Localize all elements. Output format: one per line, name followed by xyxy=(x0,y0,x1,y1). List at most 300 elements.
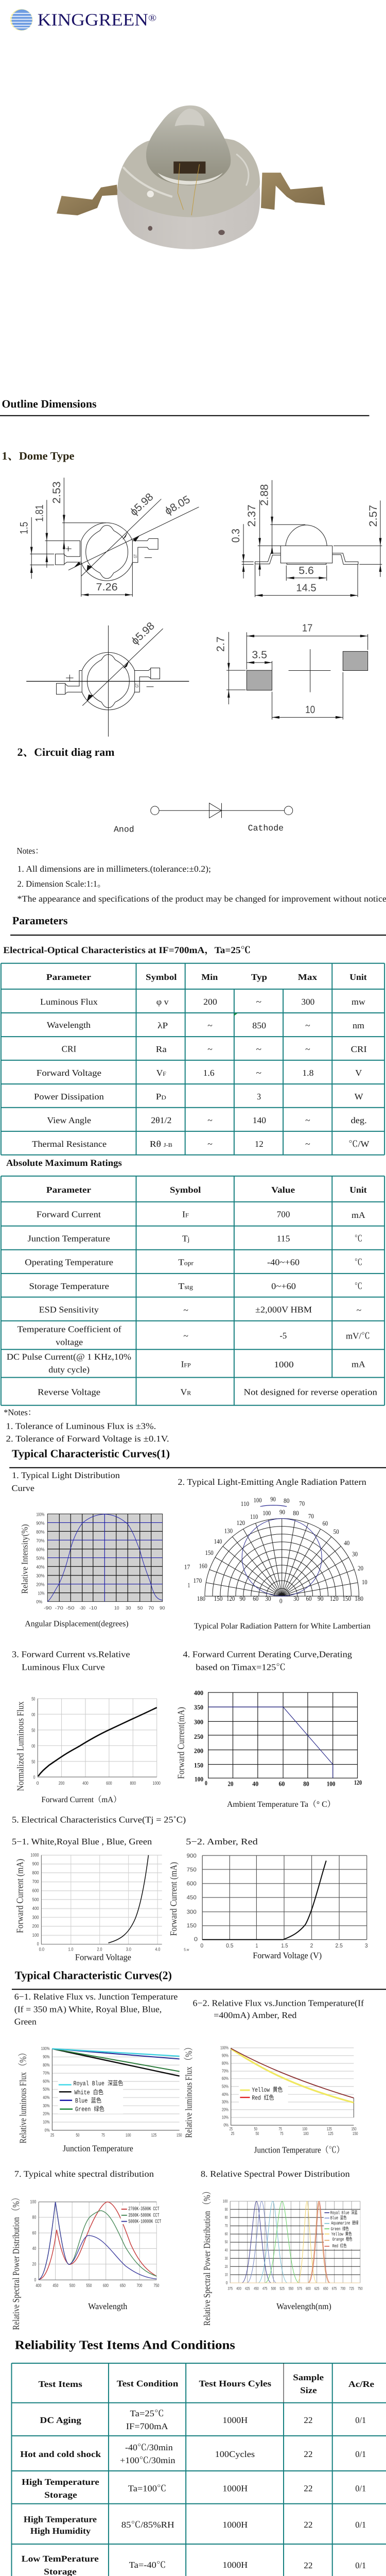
chart 7: white spectral distribution: 100 xyxy=(30,2199,36,2205)
chart 5-1: forward current vs voltage: 300 xyxy=(32,1914,39,1920)
table: electrical-optical characteristics: VF xyxy=(156,1068,166,1078)
chart 6-1: relative flux vs junction temperature: 90% xyxy=(43,2054,50,2059)
chart 5-2: forward current vs voltage: 750 xyxy=(187,1866,197,1873)
table: reliability tests: Storage xyxy=(44,2490,77,2500)
chart 5-1: forward current vs voltage xyxy=(15,1852,162,1962)
chart 8: relative spectral power distribution: 625 xyxy=(314,2286,319,2291)
table: electrical-optical characteristics xyxy=(1,963,384,1155)
chart 7: white spectral distribution: 400 xyxy=(36,2283,41,2288)
chart 1: light distribution curve: -30 xyxy=(79,1605,85,1611)
chart 2: polar radiation pattern: 40 xyxy=(344,1539,349,1547)
chart 2: polar radiation pattern: 60 xyxy=(323,1520,328,1527)
chart 6-1: relative flux vs junction temperature: 70% xyxy=(43,2071,50,2076)
chart 1: light distribution curve: 10% xyxy=(38,1591,45,1596)
chart 3: normalized luminous flux vs forward current: 600 xyxy=(106,1781,112,1786)
table: absolute maximum ratings: -5 xyxy=(279,1331,287,1341)
chart 2: polar radiation pattern: 60 xyxy=(306,1595,312,1602)
chart 5-2: forward current vs voltage: 2 xyxy=(310,1942,313,1948)
table: electrical-optical characteristics: 140 xyxy=(253,1115,266,1125)
chart 5-1: forward current vs voltage: 4.0 xyxy=(155,1946,160,1952)
chart 5-2: forward current vs voltage: 600 xyxy=(187,1880,197,1887)
table: electrical-optical characteristics: PD xyxy=(156,1092,166,1101)
drawing: top view with dimensions: 2.53 xyxy=(51,481,63,504)
circuit diagram: diode symbol: Cathode xyxy=(248,823,284,833)
chart 6-1: relative flux vs junction temperature: 125 xyxy=(151,2132,156,2138)
chart 1: light distribution curve: 30 xyxy=(126,1605,131,1611)
drawing: side view with dimensions: 2.88 xyxy=(258,484,270,506)
chart 7: white spectral distribution: 20 xyxy=(32,2262,36,2267)
chart 5-1: forward current vs voltage: 800 xyxy=(32,1870,39,1875)
table: reliability tests: Ta=-40℃ xyxy=(129,2560,166,2570)
table: reliability tests: Hot and cold shock xyxy=(20,2449,101,2459)
drawing: top view with dimensions xyxy=(18,478,199,597)
chart 6-2: relative flux vs junction temperature: 50 xyxy=(255,2131,259,2136)
chart 8 title: 8. Relative Spectral Power Distribution xyxy=(201,2169,350,2179)
chart 5-2: forward current vs voltage: 900 xyxy=(187,1852,197,1859)
drawing: lower-left top view xyxy=(26,620,189,737)
chart 1: light distribution curve xyxy=(20,1512,165,1628)
table: absolute maximum ratings: Storage Temperature xyxy=(29,1281,109,1291)
table: reliability tests: 0/1 xyxy=(355,2561,366,2570)
chart 7: white spectral distribution: 0 xyxy=(34,2277,36,2282)
chart 2: polar radiation pattern: 120 xyxy=(237,1519,245,1527)
table: electrical-optical characteristics: Luminous Flux xyxy=(40,997,98,1007)
heading: 2 Circuit diagram: 2、Circuit diag ram xyxy=(17,746,114,758)
table: absolute maximum ratings: IF xyxy=(182,1210,189,1219)
table: absolute maximum ratings: 700 xyxy=(277,1210,290,1219)
chart 1: light distribution curve: 30% xyxy=(36,1573,45,1579)
chart 5-2: forward current vs voltage: 1 xyxy=(255,1942,258,1948)
table: absolute maximum ratings: Temperature Coefficient of xyxy=(17,1325,121,1334)
chart 2: polar radiation pattern: 160 xyxy=(199,1562,207,1569)
heading: Outline Dimensions: Outline Dimensions xyxy=(2,398,97,410)
notes text: Notes： xyxy=(17,846,43,856)
chart 1: light distribution curve: 90 xyxy=(160,1605,165,1611)
chart 2: polar radiation pattern: 120 xyxy=(330,1595,339,1602)
chart 6-2: relative flux vs junction temperature: 100 xyxy=(303,2131,309,2136)
chart 4 title: 4. Forward Current Derating Curve,Derating xyxy=(183,1650,352,1659)
table: absolute maximum ratings: mV/℃ xyxy=(346,1331,370,1341)
chart 5-1: forward current vs voltage: Forward Voltage xyxy=(75,1953,131,1962)
logo mark xyxy=(10,9,33,30)
chart 5-1: forward current vs voltage: 1.0 xyxy=(68,1946,74,1952)
chart 6-2: relative flux vs junction temperature: Yellow 黄色 xyxy=(252,2086,283,2094)
chart 8: relative spectral power distribution: 70 xyxy=(225,2223,227,2228)
table: absolute maximum ratings: voltage xyxy=(56,1337,83,1347)
chart 3 title: Luminous Flux Curve xyxy=(22,1663,105,1672)
chart 3: normalized luminous flux vs forward current: 1000 xyxy=(153,1781,161,1786)
chart 8: relative spectral power distribution: Green 绿色 xyxy=(331,2226,349,2232)
chart 6-2: relative flux vs junction temperature xyxy=(184,2043,358,2155)
table: reliability tests: High Temperature xyxy=(24,2515,97,2524)
section: absolute maximum ratings table and notes xyxy=(1,1176,384,1460)
chart 2: polar radiation pattern: 50 xyxy=(334,1528,339,1535)
chart 8: relative spectral power distribution: 525 xyxy=(279,2286,285,2291)
LED product photo xyxy=(57,106,325,249)
table: reliability tests: 1000H xyxy=(222,2560,248,2570)
chart 8: relative spectral power distribution: Relative Spectral Power Distribution （%） xyxy=(202,2187,212,2326)
chart 6-2: relative flux vs junction temperature: 10% xyxy=(222,2115,229,2120)
header: logo and LED photo xyxy=(10,9,325,249)
notes text: 2. Dimension Scale:1:1。 xyxy=(17,879,106,889)
table: reliability tests: 22 xyxy=(304,2449,312,2459)
chart 4: forward current derating curve: 100 xyxy=(195,1776,203,1783)
table: absolute maximum ratings: Forward Current xyxy=(37,1210,101,1219)
table: absolute maximum ratings: Tstg xyxy=(178,1281,193,1291)
chart 5-1: forward current vs voltage: 200 xyxy=(32,1924,39,1929)
chart 1: light distribution curve: 50 xyxy=(137,1605,143,1611)
chart 1: light distribution curve: -90 xyxy=(44,1605,51,1611)
chart 4: forward current derating curve: Forward Current(mA) xyxy=(176,1707,186,1779)
chart 3: normalized luminous flux vs forward current xyxy=(15,1697,161,1804)
chart 6-1: relative flux vs junction temperature: 50% xyxy=(43,2087,50,2092)
table: reliability tests: Test Items xyxy=(39,2379,82,2389)
chart 6-1: relative flux vs junction temperature: 60% xyxy=(43,2079,50,2084)
chart 2: polar radiation pattern: 70 xyxy=(299,1500,305,1507)
chart 2: polar radiation pattern xyxy=(184,1496,371,1630)
chart 2: polar radiation pattern: 150 xyxy=(205,1549,214,1556)
chart 7: white spectral distribution: 650 xyxy=(120,2283,126,2288)
chart 6-2: relative flux vs junction temperature: 25 xyxy=(231,2131,234,2136)
table: absolute maximum ratings: IFP xyxy=(181,1360,191,1369)
table title: absolute maximum ratings: Absolute Maximum Ratings xyxy=(6,1158,122,1168)
chart 6-2: relative flux vs junction temperature: 60% xyxy=(222,2076,229,2081)
table: absolute maximum ratings: ℃ xyxy=(355,1258,362,1267)
chart 8: relative spectral power distribution: Orange 橙色 xyxy=(332,2236,352,2242)
chart 3: normalized luminous flux vs forward current: 50 xyxy=(31,1759,35,1765)
chart 4: forward current derating curve: Ambient Temperature Ta（° C） xyxy=(227,1800,335,1809)
chart 1 title: 1. Typical Light Distribution xyxy=(12,1470,120,1480)
chart 4: forward current derating curve: 40 xyxy=(252,1780,258,1787)
chart 8: relative spectral power distribution: 60 xyxy=(225,2231,227,2236)
chart 5-1 title: 5−1. White,Royal Blue , Blue, Green xyxy=(12,1837,152,1846)
chart 3: normalized luminous flux vs forward current: 00 xyxy=(31,1743,35,1749)
table: reliability tests: 1000H xyxy=(222,2520,248,2530)
chart 1: light distribution curve: -50 xyxy=(66,1605,74,1611)
chart 6-2: relative flux vs junction temperature: 150 xyxy=(353,2131,358,2136)
chart 8: relative spectral power distribution: 20 xyxy=(225,2264,227,2269)
chart 7: white spectral distribution xyxy=(11,2194,161,2330)
chart 8: relative spectral power distribution: 40 xyxy=(225,2248,227,2252)
table: electrical-optical characteristics: 12 xyxy=(255,1139,264,1149)
chart 4: forward current derating curve: 300 xyxy=(194,1718,203,1725)
section: reliability test items xyxy=(11,2338,386,2576)
chart 6-2: relative flux vs junction temperature: Relative luminous Flux （%） xyxy=(184,2043,194,2138)
table: electrical-optical characteristics: CRI xyxy=(351,1044,367,1054)
chart 2: polar radiation pattern: 17 xyxy=(184,1563,190,1570)
chart 6-1 title: (If = 350 mA) White, Royal Blue, Blue, xyxy=(14,2004,162,2014)
circuit diagram: diode symbol: Anod xyxy=(114,825,134,835)
chart 5-2: forward current vs voltage: 3 xyxy=(365,1942,368,1948)
chart 4: forward current derating curve: 100 xyxy=(327,1780,335,1787)
table: reliability tests: 85℃/85%RH xyxy=(121,2520,174,2530)
table: absolute maximum ratings: ℃ xyxy=(355,1281,362,1291)
chart 3: normalized luminous flux vs forward current: 0 xyxy=(37,1781,39,1786)
chart 6-1: relative flux vs junction temperature: 20% xyxy=(43,2111,50,2116)
chart 4: forward current derating curve: 0 xyxy=(205,1780,207,1787)
chart 2: polar radiation pattern: 110 xyxy=(250,1513,258,1520)
chart 7: white spectral distribution: 600 xyxy=(103,2283,109,2288)
table: electrical-optical characteristics: View Angle xyxy=(47,1115,91,1125)
table: reliability tests: 0/1 xyxy=(355,2484,366,2493)
chart 6-2 title: =400mA) Amber, Red xyxy=(214,2010,296,2020)
chart 2: polar radiation pattern: 120 xyxy=(226,1595,235,1602)
chart 8: relative spectral power distribution: 700 xyxy=(341,2286,345,2291)
chart 6-2: relative flux vs junction temperature: 150 xyxy=(352,2127,357,2131)
chart 8: relative spectral power distribution: 600 xyxy=(306,2286,311,2291)
chart 6-2: relative flux vs junction temperature: 50% xyxy=(222,2084,229,2089)
table: reliability tests: 22 xyxy=(304,2520,312,2530)
chart 6-2: relative flux vs junction temperature: 50 xyxy=(254,2127,257,2131)
chart 1: light distribution curve: 100% xyxy=(36,1512,45,1517)
chart 5-2: forward current vs voltage: 0 xyxy=(200,1942,203,1948)
table: electrical-optical characteristics: Symbol xyxy=(146,972,177,982)
chart 4: forward current derating curve: 120 xyxy=(354,1779,362,1786)
section: flux and spectral charts: 5000K-10000K CCT xyxy=(128,2219,161,2225)
table: electrical-optical characteristics: Forward Voltage xyxy=(37,1068,101,1078)
drawing: top view with dimensions: 1.81 xyxy=(33,504,45,522)
chart 2: polar radiation pattern: 90 xyxy=(318,1595,324,1602)
chart 2: polar radiation pattern: 150 xyxy=(214,1595,222,1602)
chart 5-1: forward current vs voltage: 900 xyxy=(32,1861,39,1867)
table: absolute maximum ratings: 1000 xyxy=(274,1360,294,1369)
chart 8: relative spectral power distribution: 425 xyxy=(245,2286,250,2291)
chart 4 title xyxy=(183,1650,352,1672)
table: electrical-optical characteristics: 200 xyxy=(203,997,217,1007)
chart 8: relative spectral power distribution: 500 xyxy=(271,2286,276,2291)
table: absolute maximum ratings: ~ xyxy=(183,1331,188,1341)
chart 5-2: forward current vs voltage: 0.5 xyxy=(226,1942,233,1948)
table: absolute maximum ratings: duty cycle) xyxy=(48,1365,90,1375)
chart 6-2: relative flux vs junction temperature: 25 xyxy=(230,2127,233,2131)
chart 8: relative spectral power distribution: 10 xyxy=(225,2272,227,2277)
table: electrical-optical characteristics: Wavelength xyxy=(47,1020,91,1030)
chart 8: relative spectral power distribution: 400 xyxy=(236,2286,241,2291)
table: reliability tests: Size xyxy=(300,2385,317,2395)
section: parameters xyxy=(1,914,386,1168)
table: electrical-optical characteristics: ~ xyxy=(305,1139,310,1149)
chart 7: white spectral distribution: 2700K-3500K CCT xyxy=(128,2206,159,2212)
chart 3: normalized luminous flux vs forward current: 400 xyxy=(82,1781,89,1786)
chart 6-2: relative flux vs junction temperature: Red 红色 xyxy=(252,2094,274,2102)
table: electrical-optical characteristics: 300 xyxy=(301,997,314,1007)
table: absolute maximum ratings: Reverse Voltage xyxy=(38,1387,100,1397)
brand name: ® xyxy=(148,12,156,23)
chart 5-1: forward current vs voltage: 600 xyxy=(32,1888,39,1893)
drawing: top view with dimensions: GT xyxy=(133,554,138,558)
drawing: lower-left top view: GT xyxy=(134,683,139,688)
chart 1: light distribution curve: -70 xyxy=(55,1605,63,1611)
chart 6-1: relative flux vs junction temperature: Blue 蓝色 xyxy=(75,2097,101,2105)
table: electrical-optical characteristics: Parameter xyxy=(46,972,91,982)
table: reliability tests: 22 xyxy=(304,2561,312,2570)
chart 3: normalized luminous flux vs forward current: 0 xyxy=(33,1775,35,1780)
chart 4: forward current derating curve: 80 xyxy=(303,1780,309,1787)
chart 7: white spectral distribution: 80 xyxy=(32,2215,36,2220)
chart 2: polar radiation pattern: 100 xyxy=(254,1497,261,1504)
chart 1: light distribution curve: 60% xyxy=(36,1547,45,1552)
chart 7: white spectral distribution: Relative Spectral Power Distribution （%） xyxy=(11,2194,21,2330)
chart 6-1: relative flux vs junction temperature: 100 xyxy=(126,2132,131,2138)
chart 6-1: relative flux vs junction temperature: Green 绿色 xyxy=(75,2106,104,2113)
chart 6-1: relative flux vs junction temperature: Junction Temperature xyxy=(63,2144,133,2153)
table: absolute maximum ratings: Unit xyxy=(349,1185,367,1195)
chart 6-1: relative flux vs junction temperature: 100% xyxy=(41,2046,50,2051)
chart 6-1 title: 6−1. Relative Flux vs. Junction Temperature xyxy=(14,1992,178,2002)
heading: 1 Dome Type: 1、Dome Type xyxy=(2,450,74,462)
chart 6-2: relative flux vs junction temperature: 100 xyxy=(302,2127,307,2131)
chart 4 title: based on Timax=125℃ xyxy=(196,1663,286,1672)
chart 3: normalized luminous flux vs forward current: Forward Current（mA） xyxy=(41,1795,121,1804)
table: electrical-optical characteristics: ~ xyxy=(207,1021,213,1030)
chart 5-1: forward current vs voltage: Forward Current (mA) xyxy=(15,1859,25,1933)
drawing: solder pad footprint: 3.5 xyxy=(252,649,267,660)
table: electrical-optical characteristics: 1.8 xyxy=(302,1068,313,1078)
table: electrical-optical characteristics: Max xyxy=(298,972,317,982)
table: electrical-optical characteristics: ~ xyxy=(256,1068,261,1078)
table: reliability tests: 1000H xyxy=(222,2415,248,2425)
heading: reliability test items and conditions: Reliability Test Items And Conditions xyxy=(15,2338,235,2352)
chart 2: polar radiation pattern: 60 xyxy=(253,1595,258,1602)
chart 2: polar radiation pattern: 180 xyxy=(197,1595,205,1602)
chart 6-2: relative flux vs junction temperature: 125 xyxy=(327,2127,332,2131)
chart 1: light distribution curve: -10 xyxy=(89,1605,97,1611)
chart 6-2: relative flux vs junction temperature: 75 xyxy=(280,2131,284,2136)
chart 5-1: forward current vs voltage: 3.0 xyxy=(126,1946,131,1952)
chart 2: polar radiation pattern: 140 xyxy=(214,1538,222,1545)
drawing: side view with dimensions: 2.37 xyxy=(245,504,258,527)
table: absolute maximum ratings: Parameter xyxy=(46,1185,91,1195)
chart 6-1: relative flux vs junction temperature: 0% xyxy=(45,2128,50,2132)
chart 6-2: relative flux vs junction temperature: 30% xyxy=(222,2099,229,2105)
chart 2: polar radiation pattern: 90 xyxy=(279,1509,285,1516)
table title: electrical-optical characteristics: Electrical-Optical Characteristics at IF=700mA，Ta=25℃ xyxy=(3,945,251,955)
chart 5-2: forward current vs voltage: 150 xyxy=(187,1922,197,1928)
drawing: side view with dimensions: 14.5 xyxy=(296,582,317,594)
chart 5-2 title: 5−2. Amber, Red xyxy=(186,1837,258,1846)
table: reliability tests: Low TemPerature xyxy=(22,2554,99,2564)
notes text: 1. All dimensions are in millimeters.(tolerance:±0.2); xyxy=(17,864,211,874)
heading: Parameters: Parameters xyxy=(12,914,68,927)
chart 7: white spectral distribution: 60 xyxy=(32,2230,36,2235)
table: electrical-optical characteristics: Typ xyxy=(251,972,267,982)
chart 2: polar radiation pattern: 110 xyxy=(241,1500,249,1507)
chart 7: white spectral distribution: 550 xyxy=(86,2283,92,2288)
chart 6-2: relative flux vs junction temperature: 0% xyxy=(223,2123,229,2128)
table: electrical-optical characteristics: ~ xyxy=(305,1044,310,1054)
chart 8: relative spectral power distribution: Wavelength(nm) xyxy=(276,2301,331,2311)
chart 5-2: forward current vs voltage xyxy=(168,1852,368,1960)
chart 1: light distribution curve: 0% xyxy=(36,1599,42,1604)
chart 2: polar radiation pattern: 30 xyxy=(265,1595,271,1602)
table: electrical-optical characteristics: 850 xyxy=(252,1021,266,1030)
chart 3 title xyxy=(12,1650,130,1672)
table: absolute maximum ratings: ±2,000V HBM xyxy=(255,1305,312,1315)
table: absolute maximum ratings: ℃ xyxy=(355,1234,362,1244)
table: reliability tests: 0/1 xyxy=(355,2449,366,2459)
chart 7: white spectral distribution: 750 xyxy=(153,2283,159,2288)
chart 5-1: forward current vs voltage: 0 xyxy=(37,1941,39,1946)
section: electrical characteristics curves xyxy=(12,1815,386,2026)
chart 6-2: relative flux vs junction temperature: 90% xyxy=(222,2053,229,2058)
drawing: solder pad footprint: 17 xyxy=(302,622,312,634)
chart 2: polar radiation pattern: 130 xyxy=(224,1527,233,1534)
chart 1: light distribution curve: 40% xyxy=(36,1565,45,1570)
chart 4: forward current derating curve: 400 xyxy=(194,1689,203,1697)
chart 5-1: forward current vs voltage: 0.0 xyxy=(39,1946,44,1952)
chart 6-2: relative flux vs junction temperature: Junction Temperature（℃） xyxy=(254,2145,344,2155)
table: absolute maximum ratings: ~ xyxy=(183,1305,188,1315)
table: electrical-optical characteristics: CRI xyxy=(62,1044,76,1054)
table: electrical-optical characteristics: V xyxy=(355,1068,362,1078)
chart 2: polar radiation pattern: 90 xyxy=(270,1496,276,1503)
chart 7: white spectral distribution: 40 xyxy=(32,2246,36,2251)
table: absolute maximum ratings: Symbol xyxy=(170,1185,201,1195)
table: electrical-optical characteristics: mw xyxy=(352,997,365,1007)
chart 8: relative spectral power distribution: Royal Blue 深蓝 xyxy=(330,2210,358,2215)
notes below ratings table xyxy=(4,1408,169,1444)
chart 6-2: relative flux vs junction temperature: 20% xyxy=(222,2107,229,2112)
chart 2: polar radiation pattern: 1 xyxy=(187,1582,190,1589)
table: absolute maximum ratings xyxy=(1,1176,384,1405)
notes below ratings table: 2. Tolerance of Forward Voltage is ±0.1V. xyxy=(6,1434,169,1444)
chart 5-2: forward current vs voltage: 450 xyxy=(187,1894,197,1901)
chart 8: relative spectral power distribution: 450 xyxy=(254,2286,259,2291)
chart 2: polar radiation pattern: 10 xyxy=(362,1579,367,1586)
table: electrical-optical characteristics: 1.6 xyxy=(203,1068,215,1078)
drawing: top view with dimensions: ϕ5.98 xyxy=(128,491,155,518)
table: electrical-optical characteristics: ~ xyxy=(207,1139,213,1149)
section: typical characteristic curves 1 xyxy=(9,1468,386,1809)
table: electrical-optical characteristics: ~ xyxy=(256,997,261,1007)
chart 5-1: forward current vs voltage: 2.0 xyxy=(97,1946,102,1952)
chart 5 title: 5. Electrical Characteristics Curve(Tj = 25˚C) xyxy=(12,1815,186,1825)
chart 1: light distribution curve: 20% xyxy=(36,1582,45,1587)
chart 6-2: relative flux vs junction temperature: 70% xyxy=(222,2069,229,2074)
table: reliability tests: Test Hours Cyles xyxy=(199,2379,271,2388)
chart 6-1 title: Green xyxy=(14,2017,37,2026)
chart 8: relative spectral power distribution: 650 xyxy=(323,2286,328,2291)
chart 4: forward current derating curve: 20 xyxy=(227,1780,233,1787)
chart 2: polar radiation pattern: 100 xyxy=(262,1510,271,1517)
chart 3: normalized luminous flux vs forward current: 50 xyxy=(31,1697,35,1702)
chart 8: relative spectral power distribution: 0 xyxy=(226,2280,227,2285)
table: reliability tests: DC Aging xyxy=(40,2415,81,2425)
drawing: side view with dimensions: 2.57 xyxy=(367,505,379,527)
drawing: top view with dimensions: ϕ8.05 xyxy=(163,494,192,517)
chart 6-1 title xyxy=(14,1992,178,2026)
chart 6-1: relative flux vs junction temperature: 50 xyxy=(76,2132,79,2138)
chart 2: polar radiation pattern: 180 xyxy=(355,1595,363,1602)
table: reliability tests: +100℃/30min xyxy=(120,2455,176,2465)
chart 8: relative spectral power distribution: 575 xyxy=(297,2286,302,2291)
chart 7: white spectral distribution: 450 xyxy=(52,2283,58,2288)
table: reliability tests: Test Condition xyxy=(117,2379,178,2388)
table: electrical-optical characteristics: nm xyxy=(353,1021,364,1030)
chart 4: forward current derating curve xyxy=(176,1689,362,1809)
chart 5-2: forward current vs voltage: 300 xyxy=(187,1908,197,1915)
chart 5-2: forward current vs voltage: Forward Current (mA) xyxy=(168,1862,179,1936)
chart 4: forward current derating curve: 250 xyxy=(194,1733,203,1740)
table: absolute maximum ratings: DC Pulse Current(@ 1 KHz,10% xyxy=(7,1352,131,1362)
drawing: lower-left top view: ϕ5.98 xyxy=(129,620,157,647)
chart 4: forward current derating curve: 60 xyxy=(278,1780,285,1787)
chart 2: polar radiation pattern: 30 xyxy=(352,1550,358,1557)
drawing: side view with dimensions: 0.3 xyxy=(230,529,242,543)
table: reliability tests: 22 xyxy=(304,2415,312,2425)
chart 5-2: forward current vs voltage: 0 xyxy=(194,1936,198,1942)
table: electrical-optical characteristics: Thermal Resistance xyxy=(32,1139,107,1149)
